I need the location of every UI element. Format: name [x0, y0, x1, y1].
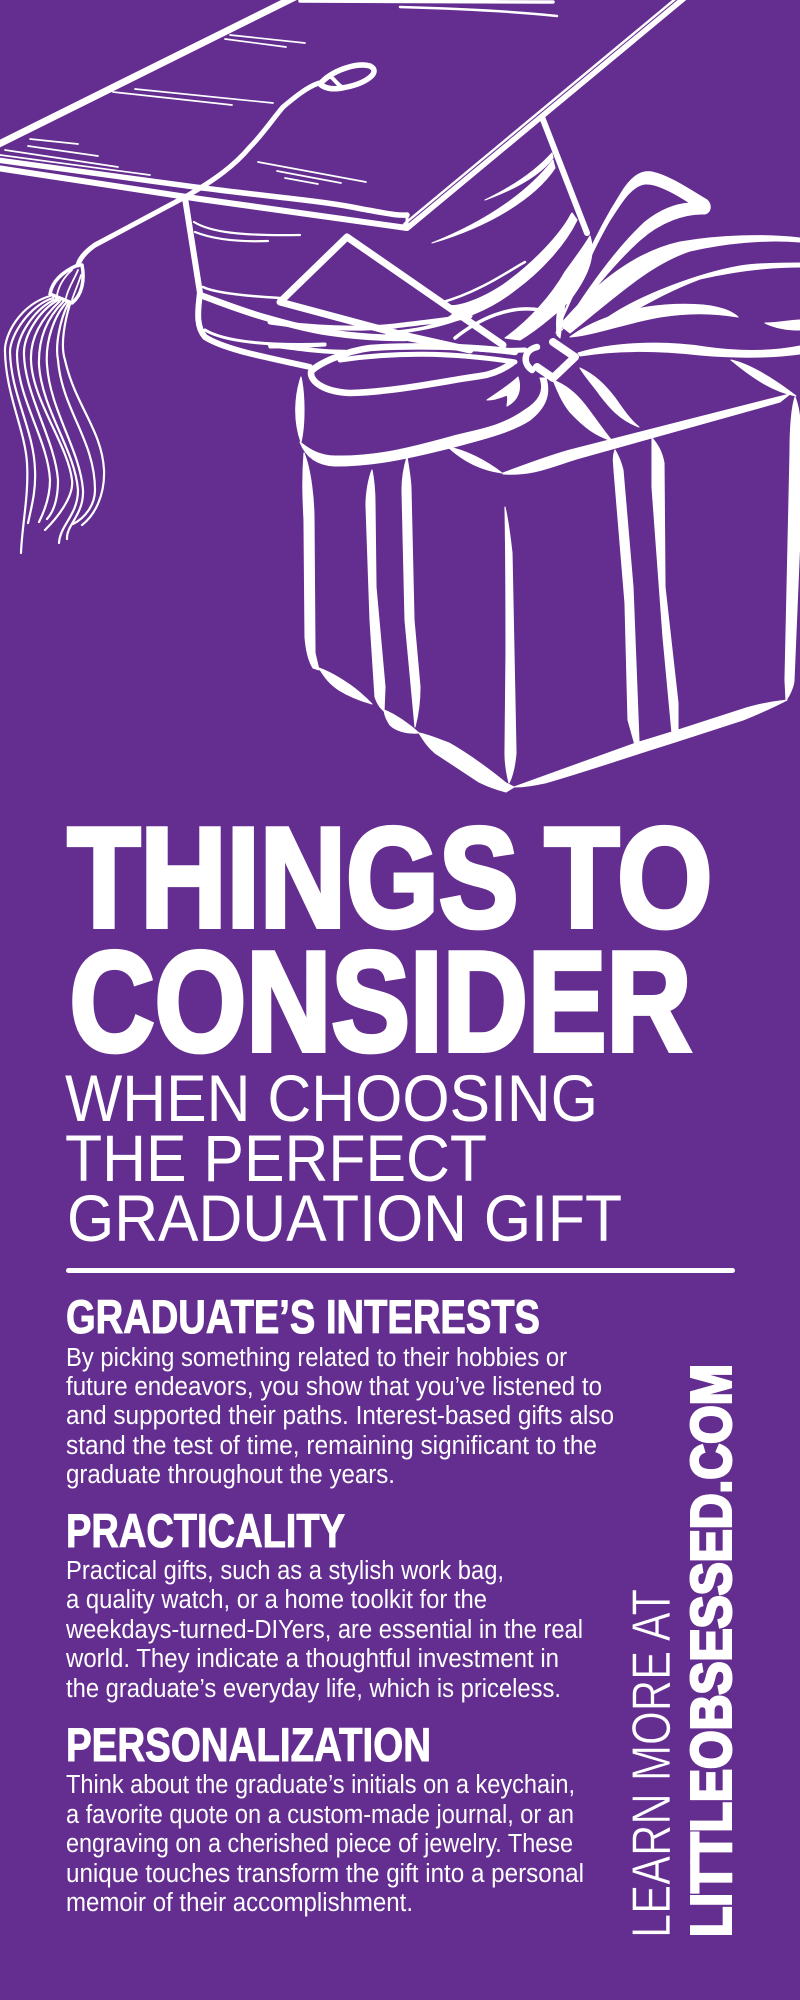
section: personalization — [66, 1718, 584, 1917]
illustration: graduation cap and gift box — [0, 0, 800, 792]
call to action: vertical website text: LEARN MORE AT — [620, 1589, 682, 1938]
body text: the graduate’s everyday life, which is priceless. — [66, 1675, 561, 1703]
title: TO — [544, 798, 712, 958]
title: THINGS — [68, 798, 518, 958]
body text: a favorite quote on a custom-made journal, or an — [66, 1801, 574, 1829]
body text: memoir of their accomplishment. — [66, 1889, 413, 1917]
box lid — [296, 377, 790, 474]
icon: ribbon bow — [270, 172, 800, 441]
title — [68, 798, 712, 1082]
body text: Think about the graduate’s initials on a keychain, — [66, 1771, 575, 1799]
body text: engraving on a cherished piece of jewelry. These — [66, 1830, 573, 1858]
heading: GRADUATE’S INTERESTS — [66, 1290, 540, 1343]
body text: future endeavors, you show that you’ve listened to — [66, 1373, 602, 1401]
body text: and supported their paths. Interest-based gifts also — [66, 1402, 614, 1430]
subtitle: WHEN CHOOSING — [65, 1061, 598, 1135]
icon: gift box — [296, 377, 800, 792]
body text — [66, 1771, 584, 1917]
body text: By picking something related to their hobbies or — [66, 1344, 567, 1372]
section: practicality — [65, 1504, 583, 1703]
section: graduate's interests — [66, 1290, 614, 1489]
icon: envelope flap — [280, 237, 503, 350]
cap hatching — [0, 1, 557, 184]
heading: PERSONALIZATION — [66, 1718, 431, 1771]
body text: graduate throughout the years. — [66, 1461, 395, 1489]
icon: tassel — [5, 65, 374, 553]
subtitle: GRADUATION GIFT — [67, 1181, 622, 1255]
box ribbons and edges — [303, 397, 800, 792]
title: CONSIDER — [70, 922, 692, 1082]
subtitle — [65, 1061, 622, 1255]
call to action: vertical website text — [620, 1364, 744, 1938]
body text: a quality watch, or a home toolkit for the — [66, 1586, 487, 1614]
subtitle: THE PERFECT — [65, 1121, 487, 1195]
body text: Practical gifts, such as a stylish work bag, — [66, 1557, 504, 1585]
call to action: vertical website text: LITTLEOBSESSED.COM — [680, 1364, 744, 1937]
body text: unique touches transform the gift into a personal — [66, 1860, 584, 1888]
body text: stand the test of time, remaining significant to the — [66, 1432, 597, 1460]
body text — [65, 1557, 583, 1703]
body text — [66, 1344, 614, 1489]
body text: world. They indicate a thoughtful investment in — [65, 1645, 559, 1673]
icon: graduation cap — [0, 0, 684, 367]
body text: weekdays-turned-DIYers, are essential in the real — [65, 1616, 583, 1644]
heading: PRACTICALITY — [66, 1504, 345, 1557]
